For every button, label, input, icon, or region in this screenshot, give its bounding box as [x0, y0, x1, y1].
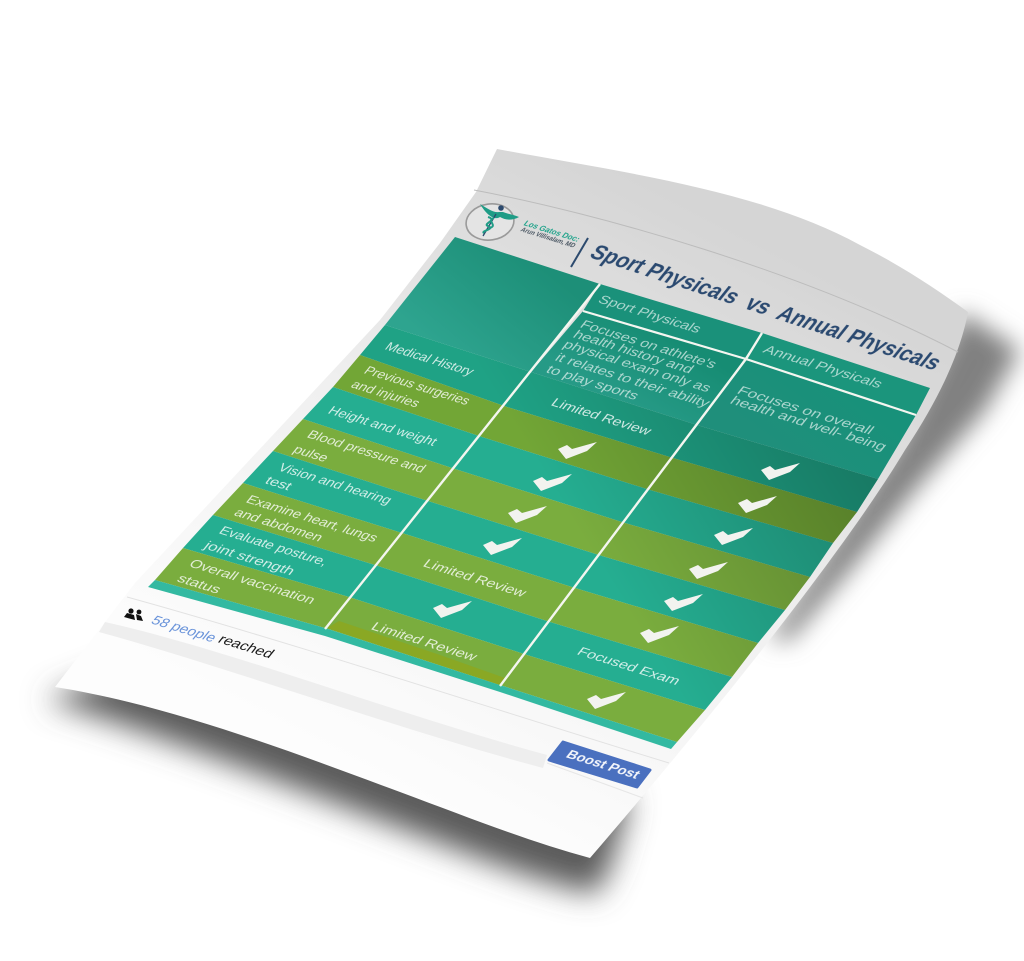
- logo doctor name: Arun Villisalam, MD: [519, 226, 578, 249]
- check: previous surgeries: [558, 442, 597, 459]
- paper shadow: right edge: [770, 312, 1020, 640]
- check: height and weight: [714, 528, 753, 545]
- check: blood pressure: [689, 562, 728, 579]
- column title: sport physicals: Sport Physicals: [595, 293, 705, 336]
- row: blood pressure: [273, 419, 810, 610]
- label: examine heart: and abdomen: [231, 506, 326, 544]
- label: examine heart: Examine heart, lungs: [243, 493, 381, 544]
- sport description: physical exam only as: [560, 338, 715, 394]
- header rule line: [474, 190, 958, 352]
- header rule: annual: [746, 359, 916, 415]
- header cell: sport description: [531, 311, 745, 425]
- label: blood pressure: pulse: [290, 443, 332, 465]
- cell: limited review 3: Limited Review: [368, 620, 481, 663]
- sport description: it relates to their ability: [552, 351, 713, 410]
- gloss overlay: [155, 325, 878, 742]
- label: vision and hearing: test: [262, 474, 295, 493]
- header rule: sport: [583, 311, 746, 359]
- column line: annual: [500, 333, 762, 686]
- check: medical history: [761, 463, 800, 480]
- cell text: [368, 396, 684, 687]
- bottom strip: [148, 580, 677, 749]
- column title: annual physicals: Annual Physicals: [760, 343, 886, 391]
- title: Sport Physicals vs Annual Physicals: [584, 241, 947, 375]
- row: medical history: [360, 325, 878, 512]
- cell: focused exam: Focused Exam: [574, 645, 684, 687]
- column line: sport: [325, 284, 600, 629]
- header cell: annual physicals: [746, 333, 930, 415]
- header: empty left block: [385, 237, 600, 372]
- label: height and weight: Height and weight: [325, 404, 441, 448]
- row: vision and hearing: [243, 451, 785, 643]
- annual description: Focuses on overall: [734, 384, 877, 437]
- check: evaluate posture: [433, 601, 472, 618]
- label: evaluate posture: Evaluate posture,: [216, 524, 331, 568]
- logo name: Los Gatos Doc:: [522, 219, 582, 243]
- row labels: [174, 340, 477, 607]
- cell: limited review 2: Limited Review: [420, 557, 530, 600]
- sport description: health history and: [570, 328, 697, 376]
- annual description: health and well- being: [727, 394, 890, 453]
- label: previous surgeries: Previous surgeries: [361, 364, 474, 407]
- label: overall vaccination: Overall vaccination: [186, 557, 319, 607]
- comparison table: [148, 237, 930, 749]
- olive patch: last sport cell: [327, 621, 505, 685]
- label: previous surgeries: and injuries: [348, 378, 423, 410]
- icon: people: [124, 608, 143, 621]
- reach count: reached: [215, 633, 277, 661]
- label: overall vaccination: status: [174, 572, 225, 596]
- row: height and weight: [303, 387, 833, 577]
- sport column checkmarks: [433, 442, 597, 618]
- sport description: [543, 318, 720, 410]
- row: previous surgeries: [333, 355, 857, 543]
- boost post button: [549, 742, 650, 787]
- label: evaluate posture: joint strength: [200, 538, 298, 578]
- row: examine: [213, 483, 758, 677]
- check: height and weight: [533, 474, 572, 491]
- logo: Los Gatos Doc: [464, 201, 582, 249]
- title divider: [571, 238, 588, 267]
- reach count: 58 people: [148, 614, 219, 645]
- check: vaccination: [587, 692, 626, 709]
- paper shadow: bottom edge: [46, 600, 630, 894]
- row: evaluate posture: [183, 515, 732, 710]
- cell: limited review 1: Limited Review: [548, 396, 655, 438]
- header cell: sport physicals: [583, 284, 762, 358]
- check: vision and hearing: [483, 538, 522, 555]
- label: medical history: Medical History: [382, 340, 477, 378]
- boost post button: Boost Post: [563, 748, 643, 781]
- header cell: annual description: [697, 360, 916, 479]
- footer lower rule line: [547, 763, 643, 798]
- annual column checkmarks: [587, 463, 800, 709]
- logo emblem: caduceus: [464, 201, 519, 243]
- header text: [543, 293, 890, 453]
- label: blood pressure: Blood pressure and: [304, 428, 429, 475]
- check: vision and hearing: [664, 594, 703, 611]
- label: vision and hearing: Vision and hearing: [275, 461, 395, 507]
- reach count: [148, 614, 277, 661]
- paper sheet: [55, 149, 968, 858]
- annual description: [727, 384, 890, 453]
- sport description: to play sports: [543, 363, 642, 402]
- footer grey band: [99, 622, 547, 768]
- row: vaccination: [155, 548, 705, 742]
- sport description: Focuses on athlete's: [577, 318, 720, 371]
- check: previous surgeries: [738, 496, 777, 513]
- footer rule line: [127, 597, 669, 763]
- check: blood pressure: [508, 506, 547, 523]
- check: examine: [640, 626, 679, 643]
